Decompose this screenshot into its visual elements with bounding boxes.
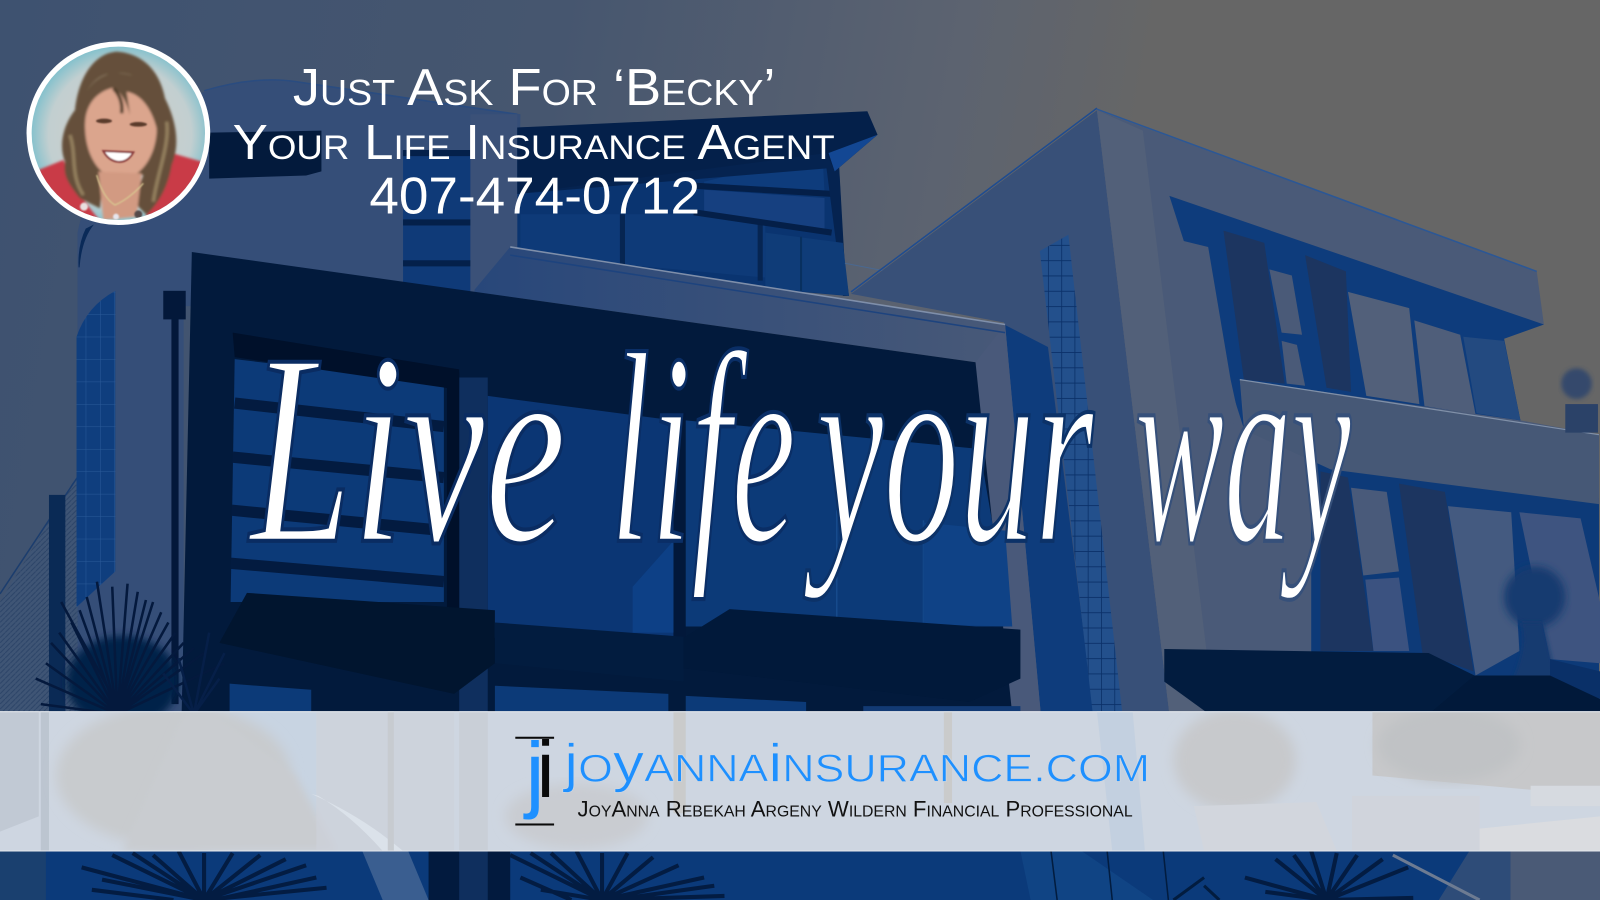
main script title: Live	[247, 298, 566, 601]
main script title: your	[802, 298, 1096, 601]
banner panel	[0, 704, 1600, 851]
banner ghosted photo detail	[0, 704, 1600, 851]
line: your life insurance agent: Your Life Insurance Agent	[233, 116, 835, 170]
dark frame of front block	[182, 252, 1012, 714]
left curved tower wall	[0, 80, 520, 900]
main script title	[247, 298, 1352, 601]
eyes and smile	[80, 119, 147, 220]
main script title: life	[610, 298, 796, 601]
upper right recessed windows	[1169, 196, 1544, 429]
portrait	[26, 41, 210, 225]
line: just ask for Becky: Just Ask For ‘Becky’	[293, 59, 776, 117]
website address: jOyANNA iNSURANCE.COM	[562, 734, 1150, 794]
front glass windows	[231, 333, 1012, 714]
right balcony slab	[1240, 380, 1599, 504]
palms below banner	[82, 851, 1413, 900]
header: agent call-out	[233, 59, 835, 225]
right building side wall	[851, 110, 1169, 714]
lower strip below banner	[0, 851, 1600, 900]
lower right windows	[1164, 459, 1600, 714]
left palm	[36, 582, 224, 728]
right building front wall	[1097, 110, 1599, 714]
glass block column	[1040, 235, 1122, 714]
balcony slabs	[219, 593, 1020, 714]
text: way	[1135, 298, 1352, 601]
logo mark	[515, 725, 554, 826]
front block upper balcony	[474, 247, 1041, 714]
logo mark: j	[523, 725, 545, 821]
agent name line: JoyAnna Rebekah Argeny Wildern Financial Professional	[578, 796, 1133, 821]
phone number: 407-474-0712	[369, 167, 700, 225]
rooftop pot plant	[1561, 368, 1598, 433]
hair	[62, 52, 176, 215]
jacket	[39, 152, 201, 218]
logo mark: i	[537, 725, 554, 814]
face and chest	[85, 87, 157, 180]
upper storey windows and roof	[403, 111, 900, 296]
